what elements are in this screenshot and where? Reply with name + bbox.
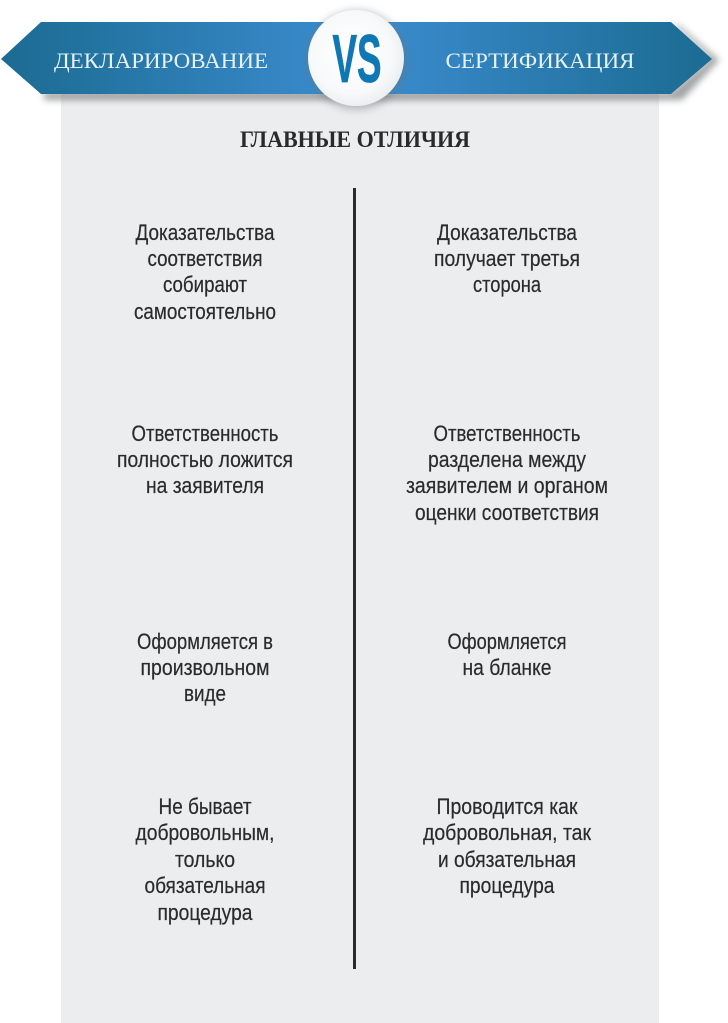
left item 3: произвольном bbox=[140, 655, 270, 680]
banner: left arrow bbox=[1, 22, 340, 94]
right item 1: получает третья bbox=[434, 246, 580, 271]
left item 4: обязательная bbox=[144, 873, 266, 898]
right item 4 bbox=[423, 794, 591, 898]
left item 4: только bbox=[175, 847, 235, 872]
panel: grey background bbox=[61, 94, 659, 1023]
right item 3: Оформляется bbox=[448, 629, 566, 654]
left item 1: Доказательства bbox=[136, 220, 275, 245]
left item 2: на заявителя bbox=[146, 473, 264, 498]
VS badge bbox=[307, 10, 407, 110]
left item 3: Оформляется в bbox=[137, 629, 273, 654]
left item 2 bbox=[117, 421, 293, 498]
right item 2: Ответственность bbox=[434, 421, 580, 446]
VS text: VS bbox=[332, 21, 382, 97]
right item 4: и обязательная bbox=[438, 847, 576, 872]
left item 1: самостоятельно bbox=[134, 299, 276, 324]
left item 1: соответствия bbox=[148, 246, 262, 271]
right item 2: оценки соответствия bbox=[415, 500, 599, 525]
banner: right arrow bbox=[380, 22, 712, 94]
left item 3 bbox=[137, 629, 273, 706]
right item 2: разделена между bbox=[428, 447, 586, 472]
right item 2: заявителем и органом bbox=[406, 473, 608, 498]
right item 4: процедура bbox=[460, 873, 555, 898]
banner shadow bbox=[44, 24, 719, 100]
banner label: declaration: ДЕКЛАРИРОВАНИЕ bbox=[54, 48, 268, 73]
right item 4: добровольная, так bbox=[423, 820, 591, 845]
right item 3 bbox=[448, 629, 566, 680]
right item 4: Проводится как bbox=[436, 794, 578, 819]
left item 1 bbox=[134, 220, 276, 324]
left item 4: добровольным, bbox=[136, 820, 274, 845]
left item 4: процедура bbox=[158, 900, 253, 925]
left item 4: Не бывает bbox=[158, 794, 252, 819]
center divider bbox=[353, 188, 356, 969]
title: ГЛАВНЫЕ ОТЛИЧИЯ bbox=[240, 127, 470, 152]
right item 1: Доказательства bbox=[437, 220, 578, 245]
left item 3: виде bbox=[184, 681, 226, 706]
right item 1 bbox=[434, 220, 580, 297]
left item 4 bbox=[136, 794, 274, 925]
left item 2: Ответственность bbox=[132, 421, 278, 446]
banner label: certification: СЕРТИФИКАЦИЯ bbox=[446, 48, 635, 73]
left item 1: собирают bbox=[163, 272, 247, 297]
right item 2 bbox=[406, 421, 608, 525]
right item 3: на бланке bbox=[462, 655, 552, 680]
right item 1: сторона bbox=[473, 272, 542, 297]
left item 2: полностью ложится bbox=[117, 447, 293, 472]
